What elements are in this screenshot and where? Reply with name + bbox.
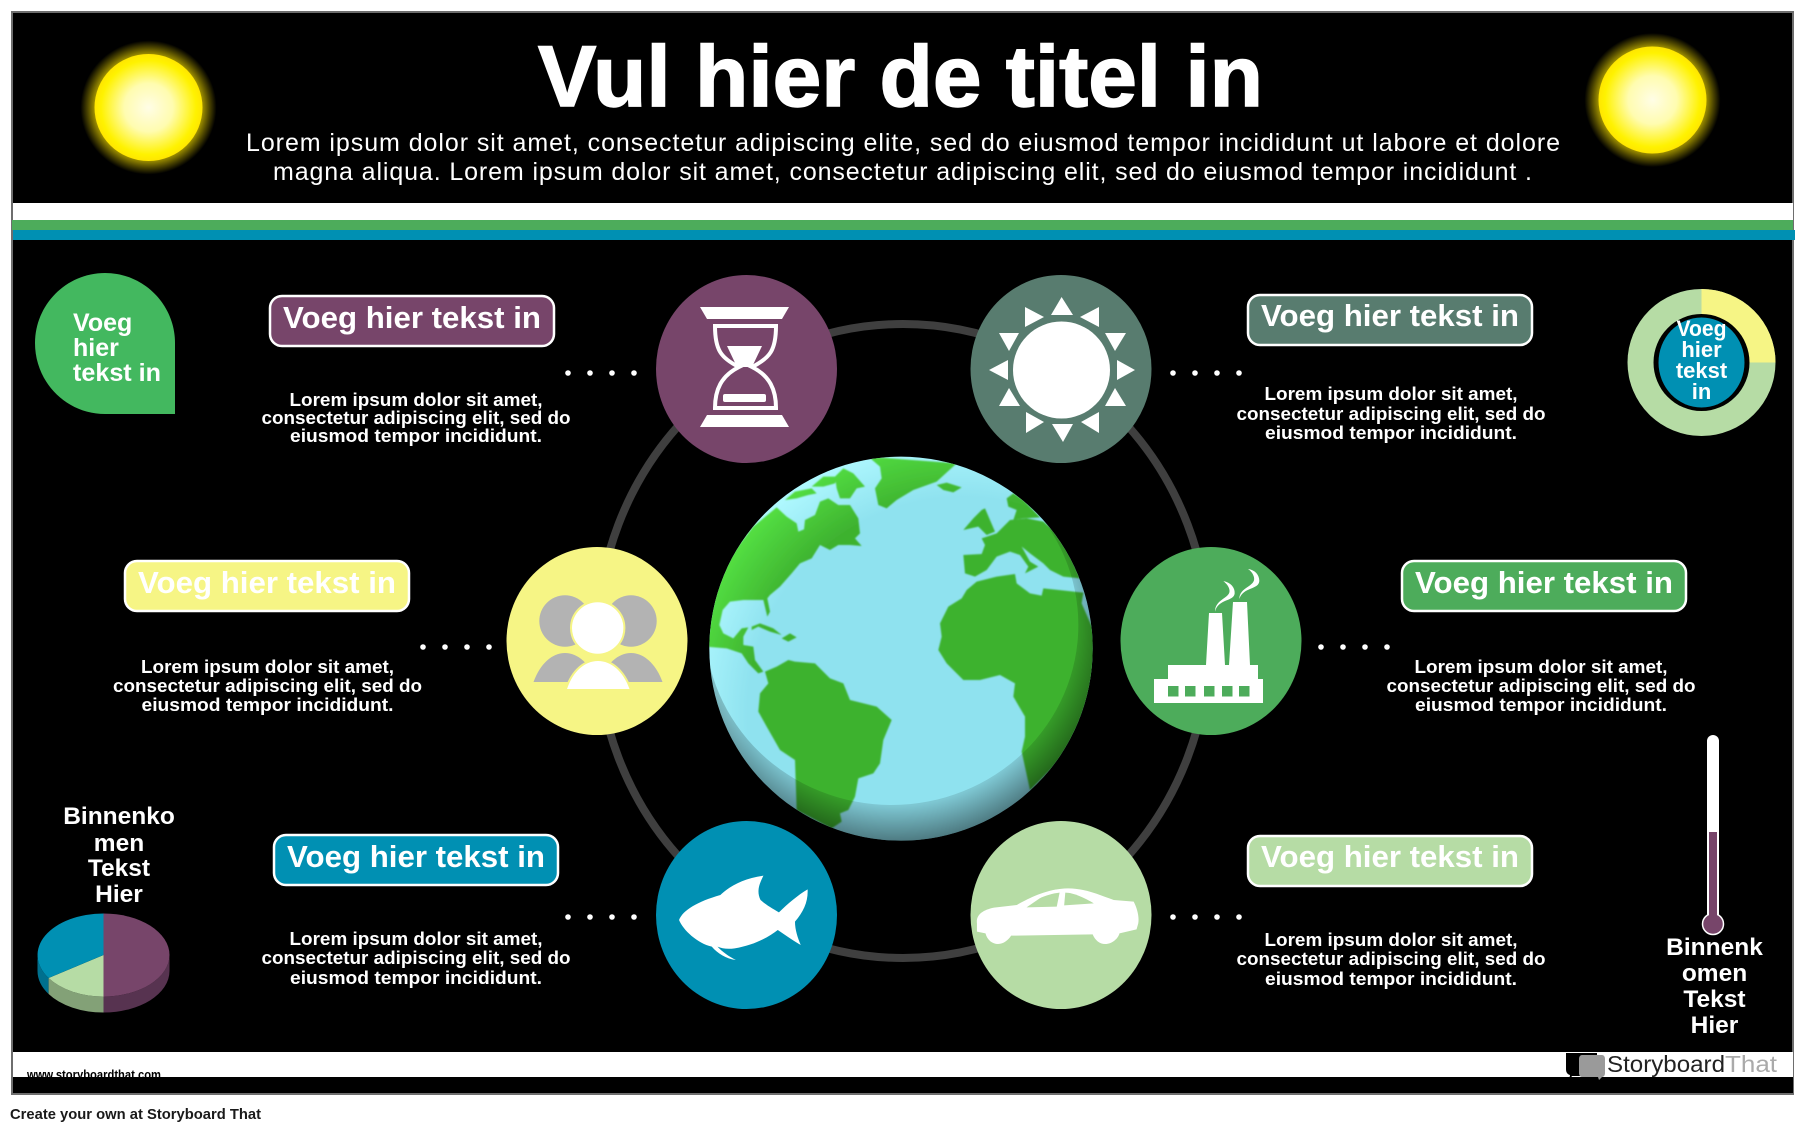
text: left chart caption: Tekst xyxy=(88,855,150,882)
text: thermometer caption: omen xyxy=(1682,960,1747,987)
text block: bottom right xyxy=(1236,930,1546,989)
text: thermometer caption: Hier xyxy=(1691,1012,1739,1039)
logo: Storyboard That: Storyboard xyxy=(1607,1051,1725,1077)
label: bottom right xyxy=(1248,836,1532,886)
text: left chart caption: Hier xyxy=(95,881,143,908)
circle: sun xyxy=(970,275,1152,463)
text block: bottom right: Lorem ipsum dolor sit amet, xyxy=(1264,930,1518,950)
dotted connector: bottom left xyxy=(565,914,637,920)
icon: people xyxy=(534,595,662,689)
text block: top left: Lorem ipsum dolor sit amet, xyxy=(290,390,542,410)
callout: green bubble: Voeg xyxy=(73,309,132,337)
subtitle text xyxy=(246,129,1560,186)
text block: top right: consectetur adipiscing elit, sed do xyxy=(1236,404,1546,424)
dotted connector: top right xyxy=(1170,370,1242,376)
dotted connector: middle right xyxy=(1318,644,1390,650)
label: bottom left: Voeg hier tekst in xyxy=(287,839,545,874)
callout: green bubble xyxy=(35,273,175,414)
text: thermometer caption xyxy=(1666,934,1763,1039)
text block: bottom left xyxy=(262,929,570,988)
icon: factory xyxy=(1154,569,1263,703)
donut chart: tekst xyxy=(1676,358,1728,383)
label: middle right: Voeg hier tekst in xyxy=(1415,565,1673,600)
text block: top left xyxy=(262,390,570,446)
text block: bottom left: eiusmod tempor incididunt. xyxy=(290,968,542,988)
label: bottom left xyxy=(274,835,558,885)
text block: middle right: Lorem ipsum dolor sit amet, xyxy=(1414,657,1668,677)
text: left chart caption: men xyxy=(94,830,144,857)
circle: hourglass xyxy=(656,275,837,463)
text: thermometer caption: Binnenk xyxy=(1666,934,1763,961)
text block: bottom right: consectetur adipiscing elit, sed do xyxy=(1236,949,1546,969)
central ring xyxy=(597,324,1209,958)
logo: Storyboard That xyxy=(1566,1051,1778,1081)
label: top left: Voeg hier tekst in xyxy=(283,300,541,335)
dotted connector: top left xyxy=(565,370,637,376)
text block: middle right: consectetur adipiscing elit, sed do xyxy=(1386,676,1696,696)
text: thermometer caption: Tekst xyxy=(1683,986,1746,1013)
icon: right sun xyxy=(1584,33,1720,167)
text block: top right xyxy=(1236,384,1546,443)
label: middle left: Voeg hier tekst in xyxy=(138,565,396,600)
text block: middle right xyxy=(1386,657,1696,715)
text block: middle right: eiusmod tempor incididunt. xyxy=(1415,695,1667,715)
text block: top left: eiusmod tempor incididunt. xyxy=(290,426,542,446)
dotted connector: middle left xyxy=(420,644,492,650)
donut chart: in xyxy=(1692,379,1711,404)
header bands xyxy=(12,203,1795,240)
text block: top right: Lorem ipsum dolor sit amet, xyxy=(1264,384,1518,404)
text block: top left: consectetur adipiscing elit, sed do xyxy=(262,408,570,428)
text block: bottom left: Lorem ipsum dolor sit amet, xyxy=(290,929,542,949)
icon: hourglass xyxy=(700,307,789,427)
logo: Storyboard That: That xyxy=(1725,1051,1778,1077)
globe xyxy=(709,456,1093,841)
icon: car xyxy=(977,888,1139,944)
icon: sun rays xyxy=(989,297,1135,442)
donut chart: hier xyxy=(1681,337,1722,362)
text block: top right: eiusmod tempor incididunt. xyxy=(1265,423,1517,443)
text block: middle left xyxy=(113,657,422,715)
caption: create your own: Create your own at Storyboard That xyxy=(10,1106,261,1123)
donut chart: Voeg xyxy=(1676,316,1726,341)
pie chart xyxy=(38,914,170,1012)
icon: fish xyxy=(679,876,808,960)
text: left chart caption xyxy=(63,803,175,908)
label: top right xyxy=(1248,295,1532,345)
icon: left sun xyxy=(80,40,216,174)
footer band xyxy=(13,1052,1793,1093)
circle: factory xyxy=(1120,547,1302,735)
text block: bottom left: consectetur adipiscing elit, sed do xyxy=(262,948,570,968)
text block: middle left: eiusmod tempor incididunt. xyxy=(142,695,394,715)
circle: car xyxy=(970,821,1152,1009)
label: top right: Voeg hier tekst in xyxy=(1261,298,1519,333)
text: left chart caption: Binnenko xyxy=(63,803,175,830)
text block: middle left: Lorem ipsum dolor sit amet, xyxy=(141,657,394,677)
title: Vul hier de titel in xyxy=(538,29,1263,125)
text block: bottom right: eiusmod tempor incididunt. xyxy=(1265,969,1517,989)
label: middle right xyxy=(1402,561,1686,611)
callout: green bubble: hier xyxy=(73,334,119,362)
subtitle text: magna aliqua. Lorem ipsum dolor sit amet, consectetur adipiscing elit, sed do eiusmod tempor incididunt . xyxy=(273,158,1532,186)
callout: green bubble: tekst in xyxy=(73,359,161,387)
label: bottom right: Voeg hier tekst in xyxy=(1261,839,1519,874)
dotted connector: bottom right xyxy=(1170,914,1242,920)
subtitle text: Lorem ipsum dolor sit amet, consectetur adipiscing elite, sed do eiusmod tempor incididunt ut labore et dolore xyxy=(246,129,1560,157)
text block: middle left: consectetur adipiscing elit, sed do xyxy=(113,676,422,696)
label: middle left xyxy=(125,561,409,611)
thermometer xyxy=(1702,735,1724,934)
donut chart xyxy=(1628,289,1776,436)
label: top left xyxy=(270,296,554,346)
circle: fish xyxy=(656,821,837,1009)
circle: people xyxy=(506,547,688,735)
footer band: www.storyboardthat.com xyxy=(26,1067,161,1082)
